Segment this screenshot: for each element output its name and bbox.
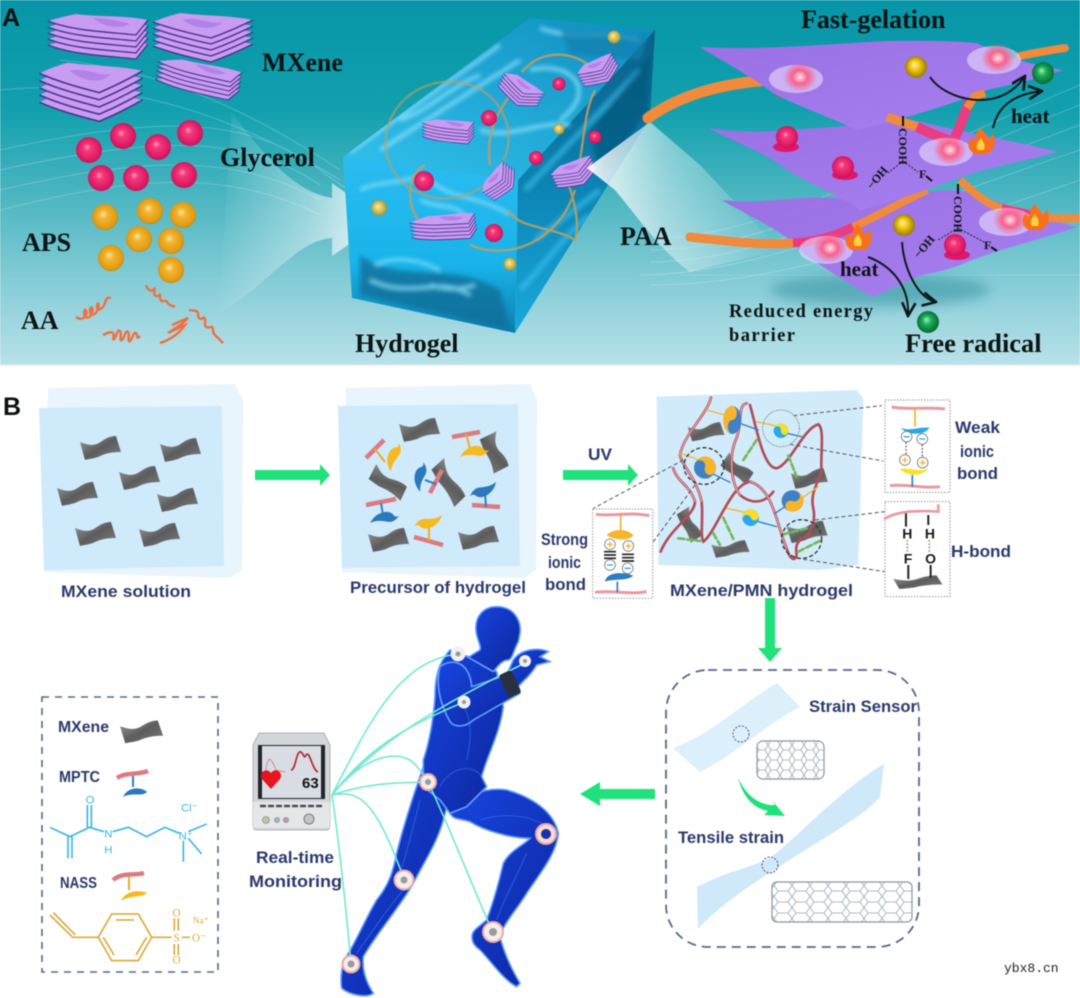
COOH bonds upper: F (919, 167, 926, 181)
label Strong ionic bond: Strong (541, 530, 588, 549)
label UV: UV (588, 445, 613, 464)
COOH bonds lower: −OH (911, 232, 938, 261)
label PAA: PAA (620, 222, 672, 251)
label Strain Sensor: Strain Sensor (809, 697, 917, 716)
letter A: A (2, 4, 20, 32)
label MXene solution: MXene solution (61, 582, 191, 601)
label Weak ionic bond: bond (957, 464, 998, 483)
panel A: hydrogel formation (0, 0, 1080, 365)
inset: strong ionic bond (593, 509, 653, 598)
relaxed strip (673, 683, 800, 772)
legend NASS (60, 873, 147, 901)
inset: H-bond: O (925, 551, 936, 567)
MPTC structure: O (86, 794, 95, 806)
wristband sensor (498, 670, 522, 698)
label Real-time Monitoring: Monitoring (249, 872, 342, 891)
monitor (253, 733, 330, 830)
heart rate value: 63 (302, 775, 319, 792)
human figure (341, 607, 558, 996)
inset: H-bond (884, 502, 950, 597)
label reduced energy barrier (729, 302, 874, 346)
beaker: MXene solution (39, 384, 243, 578)
label Precursor of hydrogel: Precursor of hydrogel (350, 578, 526, 597)
label MXene/PMN hydrogel: MXene/PMN hydrogel (670, 581, 853, 600)
label Tensile strain: Tensile strain (678, 828, 784, 847)
hydrogel block (343, 18, 655, 333)
network: MXene/PMN hydrogel (593, 390, 885, 572)
center chain (887, 93, 985, 141)
inset: weak ionic bond (885, 400, 950, 492)
arrow: ingredients into hydrogel (215, 113, 384, 315)
NASS structure: S (173, 933, 180, 945)
COOH bonds upper (864, 116, 932, 192)
label heat upper: heat (1011, 104, 1050, 128)
label Real-time Monitoring: Real-time (256, 848, 334, 867)
spheres in block (371, 30, 620, 270)
MPTC structure: N⁺ (179, 830, 193, 842)
NASS structure: O⁻ (192, 933, 206, 945)
label Weak ionic bond: ionic (960, 442, 994, 461)
stretched mesh (772, 882, 912, 922)
label reduced energy barrier: barrier (729, 326, 795, 346)
panel: strain sensor (666, 670, 919, 947)
MXene stacks (40, 13, 253, 121)
relaxed mesh (757, 741, 824, 779)
lower left chain (690, 237, 793, 244)
label Strong ionic bond (541, 530, 588, 594)
letter B: B (3, 393, 21, 421)
gold spheres (92, 198, 196, 283)
spheres on sheets (773, 56, 1054, 333)
MPTC structure (50, 794, 207, 862)
label MXene: MXene (262, 48, 343, 77)
upper left chain (648, 80, 768, 118)
label Weak ionic bond: Weak (955, 418, 1001, 437)
label reduced energy barrier: Reduced energy (729, 302, 874, 322)
label Fast-gelation: Fast-gelation (801, 5, 946, 34)
relaxed detail circle (733, 726, 749, 742)
reaction arrows (868, 76, 1042, 316)
sensor wires (332, 654, 525, 963)
lower right chain (960, 180, 1080, 218)
label Strong ionic bond: ionic (548, 553, 581, 572)
MPTC structure: H (104, 844, 112, 856)
MPTC structure: N (104, 828, 112, 840)
heart icon (261, 770, 281, 789)
middle sheet (708, 118, 1058, 210)
watermark: ybx8.cn (1004, 961, 1059, 976)
label APS: APS (22, 228, 71, 257)
inset: H-bond: F (904, 551, 913, 567)
label Strong ionic bond: bond (545, 575, 586, 594)
inset: H-bond: H (925, 525, 935, 541)
pink spheres (76, 120, 203, 191)
stacks in block (409, 49, 624, 246)
arrow: hydrogel to zoomed PAA sheets (587, 122, 780, 272)
stretched strip (697, 764, 884, 929)
legend MXene: MXene (58, 719, 109, 736)
heat spots (769, 43, 1033, 264)
label heat lower: heat (840, 257, 878, 281)
label Weak ionic bond (955, 418, 1001, 483)
legend MPTC: MPTC (59, 769, 100, 786)
flames (846, 128, 1049, 250)
label Hydrogel: Hydrogel (355, 329, 459, 358)
panel B: preparation and application (3, 384, 1011, 996)
label AA: AA (21, 306, 59, 335)
green curved arrow (738, 777, 785, 816)
MPTC structure: Cl⁻ (181, 803, 198, 815)
layered sheets with chains (648, 41, 1080, 333)
arrow: sensor to body (580, 782, 655, 806)
panel A background (0, 0, 1080, 365)
beaker: precursor of hydrogel (338, 384, 537, 578)
dashed rounded frame (666, 670, 919, 947)
arrow: UV to hydrogel (563, 464, 638, 486)
AA helices (76, 285, 223, 343)
COOH bonds upper: −OH (864, 163, 891, 192)
legend MPTC (59, 769, 148, 797)
body sensors (342, 646, 556, 972)
label free radical: Free radical (905, 328, 1042, 358)
COOH bonds lower: F (984, 238, 991, 252)
NASS structure: O (173, 908, 181, 920)
inset: H-bond: H (902, 525, 912, 541)
network strands in block (369, 55, 595, 251)
stretched detail circle (762, 857, 778, 873)
legend box (42, 697, 218, 972)
bottom sheet (722, 190, 1077, 297)
COOH bonds upper: COOH (896, 128, 910, 165)
top sheet (700, 41, 1063, 130)
COOH bonds lower: COOH (951, 196, 965, 233)
arrow: to precursor (255, 464, 330, 486)
upper right chain (1020, 48, 1065, 56)
COOH bonds lower (911, 184, 997, 261)
NASS structure: O (173, 954, 181, 966)
arrow: hydrogel to sensor (758, 598, 782, 662)
legend NASS: NASS (60, 875, 97, 892)
NASS structure: Na⁺ (193, 916, 209, 926)
NASS structure (50, 908, 209, 966)
label Glycerol: Glycerol (220, 143, 315, 172)
label H-bond: H-bond (951, 542, 1011, 561)
label Real-time Monitoring (249, 848, 342, 891)
legend MXene (58, 719, 163, 743)
